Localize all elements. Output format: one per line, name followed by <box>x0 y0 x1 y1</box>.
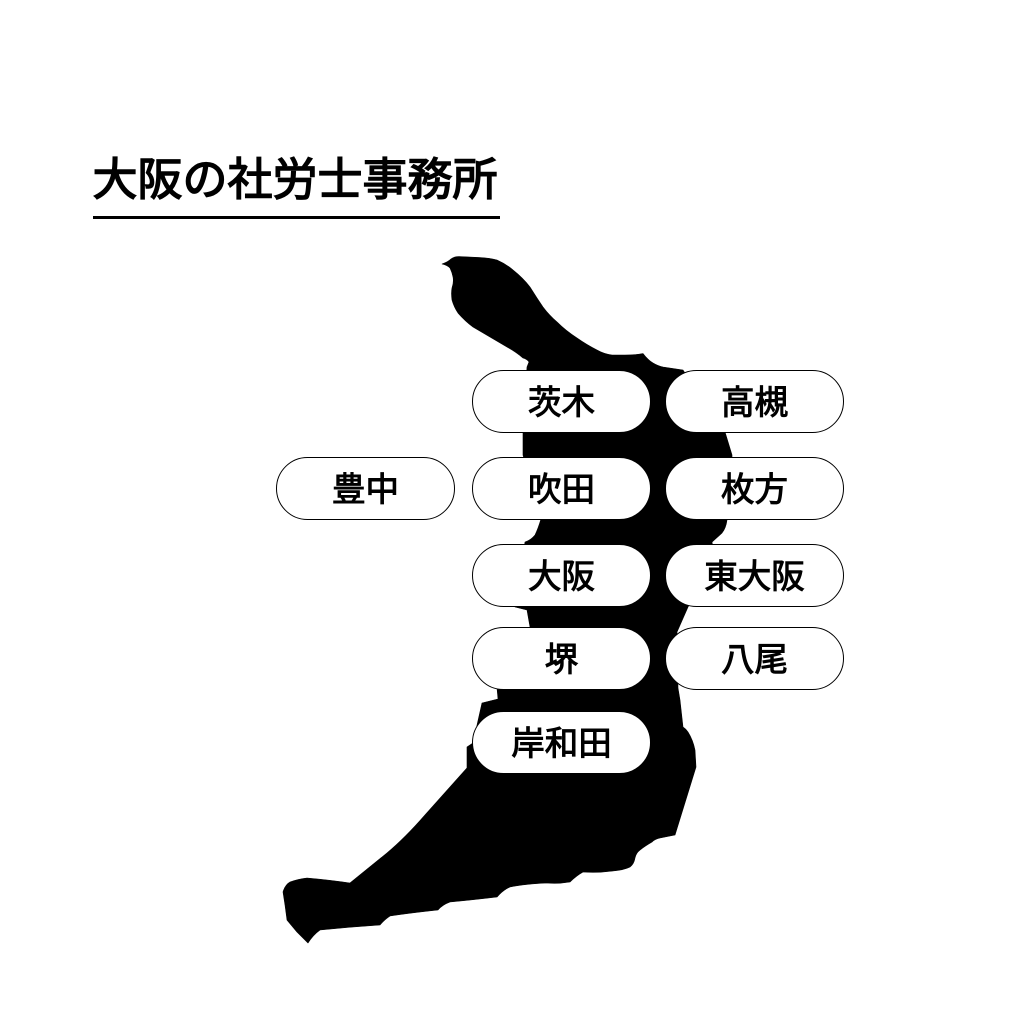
pill: 大阪: 大阪 <box>528 559 595 596</box>
pill: 豊中 <box>276 457 455 520</box>
title <box>92 146 500 219</box>
pill: 枚方 <box>665 457 844 520</box>
pill: 茨木 <box>472 370 651 433</box>
pill: 吹田: 吹田 <box>528 472 595 509</box>
pill: 堺: 堺 <box>545 642 578 679</box>
pill: 大阪 <box>472 544 651 607</box>
pill: 豊中: 豊中 <box>332 472 399 509</box>
pill: 茨木: 茨木 <box>528 385 595 422</box>
pill: 八尾: 八尾 <box>721 642 788 679</box>
pill: 堺 <box>472 627 651 690</box>
pill: 岸和田 <box>472 711 651 774</box>
pill: 吹田 <box>472 457 651 520</box>
pill: 枚方: 枚方 <box>721 472 788 509</box>
pill: 八尾 <box>665 627 844 690</box>
pill: 東大阪 <box>665 544 844 607</box>
title: 大阪の社労士事務所 <box>92 154 498 205</box>
pill: 高槻: 高槻 <box>721 385 788 422</box>
pill: 東大阪: 東大阪 <box>704 559 805 596</box>
pill: 高槻 <box>665 370 844 433</box>
pill: 岸和田: 岸和田 <box>511 726 612 763</box>
